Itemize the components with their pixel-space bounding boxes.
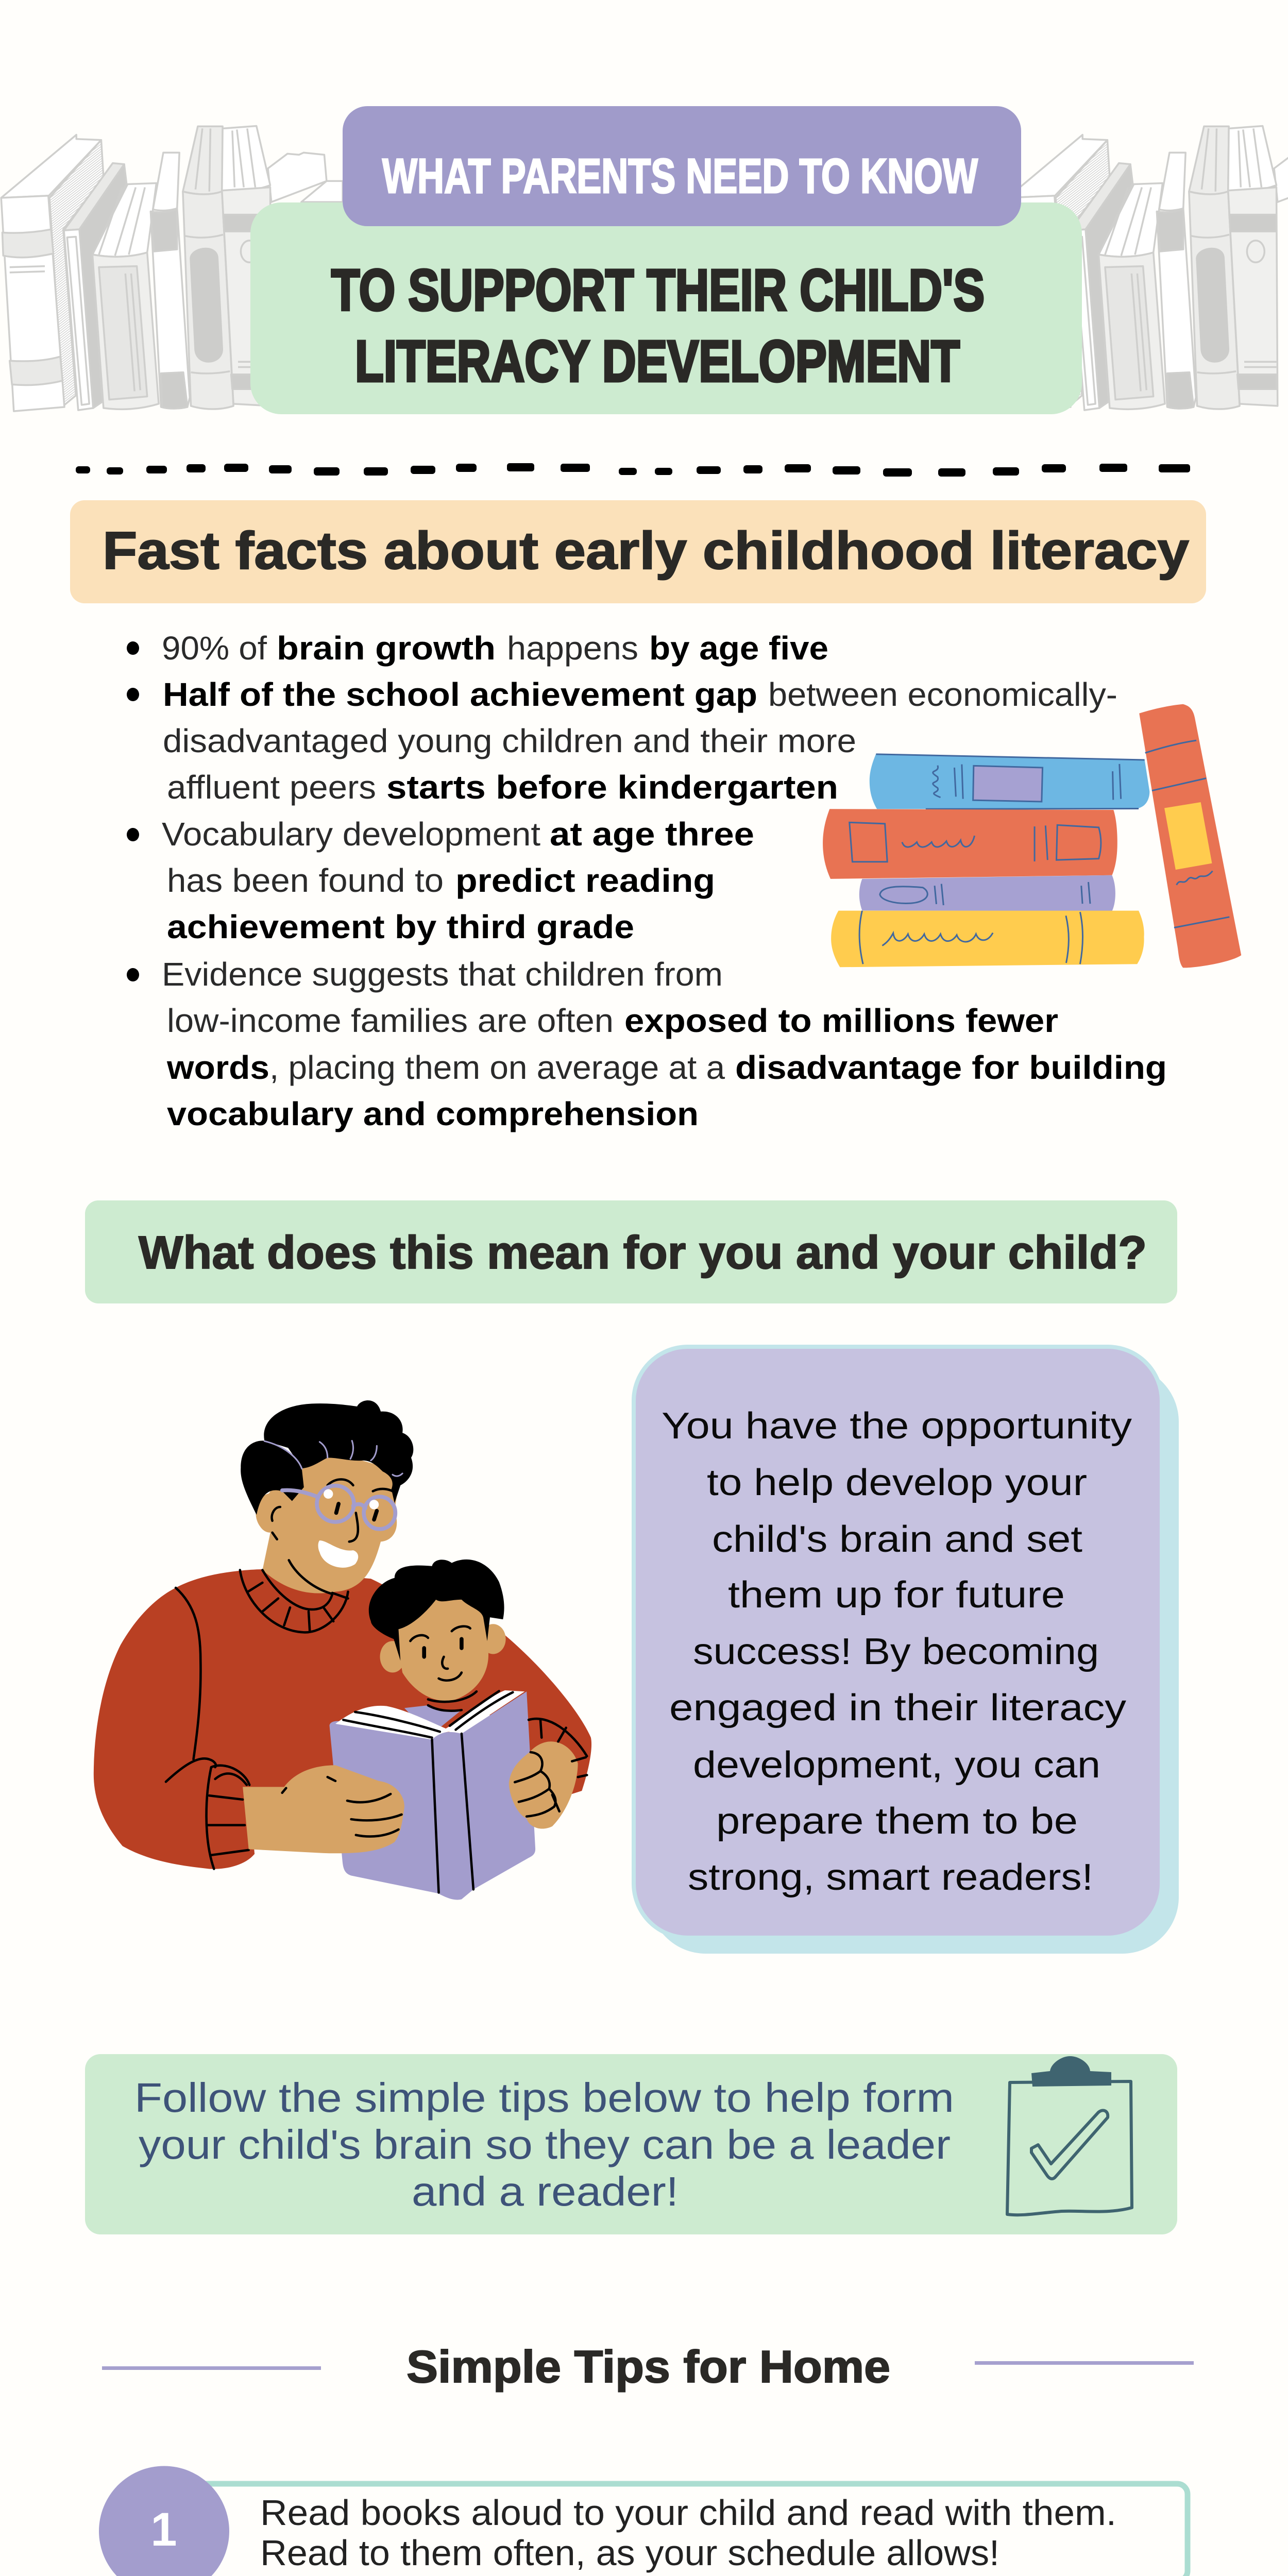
book: yellow xyxy=(831,911,1144,967)
heading: fast facts: Fast facts about early childhood literacy xyxy=(103,521,1189,580)
callout: you have the opportunity: engaged in their literacy xyxy=(669,1687,1126,1728)
illustration: right row of grey books xyxy=(1007,126,1288,411)
title line 3: LITERACY DEVELOPMENT xyxy=(355,329,960,394)
bullet 1: 90% of xyxy=(162,630,267,667)
tip 1 xyxy=(99,2466,1188,2576)
tip 1: Read books aloud to your child and read with them. xyxy=(260,2493,1116,2533)
divider: left xyxy=(102,2366,321,2370)
bullet 2: between economically- xyxy=(768,676,1117,713)
fast facts bullet list xyxy=(127,630,1167,1132)
title banner: green xyxy=(250,202,1082,414)
book: blue xyxy=(870,754,1149,809)
father head xyxy=(241,1400,413,1594)
heading panel: what does this mean xyxy=(85,1200,1177,1303)
heading: what does this mean: What does this mean for you and your child? xyxy=(139,1227,1147,1279)
bullet 2: disadvantaged young children and their more xyxy=(163,722,856,759)
bullet 3: has been found to xyxy=(167,862,444,899)
heading: simple tips for home: Simple Tips for Home xyxy=(406,2341,890,2392)
panel text: your child's brain so they can be a leader xyxy=(139,2122,951,2167)
divider: right xyxy=(975,2361,1194,2365)
callout: you have the opportunity: You have the opportunity xyxy=(662,1405,1132,1447)
tip 1: Read to them often, as your schedule allows! xyxy=(260,2533,999,2573)
open book xyxy=(330,1690,535,1900)
panel text: Follow the simple tips below to help form xyxy=(134,2075,954,2121)
icon: clipboard with check xyxy=(1007,2056,1132,2215)
callout: you have the opportunity: to help develop your xyxy=(707,1462,1087,1503)
bullet 3: achievement by third grade xyxy=(167,908,634,945)
callout: you have the opportunity: child's brain and set xyxy=(712,1519,1082,1560)
panel text xyxy=(134,2075,954,2214)
boy head xyxy=(369,1560,506,1736)
bullet 3: at age three xyxy=(550,816,754,853)
heading panel: fast facts xyxy=(70,500,1206,603)
callout: you have the opportunity xyxy=(634,1347,1179,1954)
title line 1: WHAT PARENTS NEED TO KNOW xyxy=(382,149,978,204)
callout: you have the opportunity: them up for future xyxy=(728,1574,1065,1616)
sweater details xyxy=(166,1570,348,1782)
left cuff xyxy=(207,1766,249,1869)
book: red xyxy=(823,809,1117,879)
callout: you have the opportunity: development, you can xyxy=(693,1744,1100,1786)
title line 2: TO SUPPORT THEIR CHILD'S xyxy=(331,258,985,323)
title banner: purple xyxy=(343,106,1021,226)
bullet 2 xyxy=(127,676,1117,806)
book: leaning red xyxy=(1139,704,1241,968)
bullet 1: brain growth xyxy=(277,630,496,667)
bullet 4: , placing them on average at a xyxy=(269,1049,725,1086)
tip 1: 1 xyxy=(150,2503,177,2556)
father hands xyxy=(243,1741,578,1853)
callout: you have the opportunity: prepare them to be xyxy=(716,1801,1078,1842)
bullet 4: words xyxy=(166,1049,269,1086)
illustration: father reading to child xyxy=(94,1400,591,1900)
bullet 4 xyxy=(127,956,1167,1132)
bullet 2: starts before kindergarten xyxy=(386,769,838,806)
bullet 3: Vocabulary development xyxy=(162,816,540,853)
panel: follow the simple tips xyxy=(85,2054,1177,2234)
panel text: and a reader! xyxy=(412,2168,679,2214)
illustration: left row of grey books xyxy=(1,126,343,411)
bullet 3 xyxy=(127,816,754,945)
father sweater xyxy=(94,1569,591,1869)
callout: you have the opportunity: success! By becoming xyxy=(693,1631,1099,1672)
right cuff xyxy=(529,1719,587,1777)
bullet 4: low-income families are often xyxy=(167,1002,614,1039)
illustration: stack of colourful books xyxy=(823,704,1241,968)
book: purple xyxy=(859,875,1115,911)
bullet 2: Half of the school achievement gap xyxy=(163,676,757,713)
callout: you have the opportunity: strong, smart readers! xyxy=(688,1857,1093,1898)
bullet 4: exposed to millions fewer xyxy=(624,1002,1058,1039)
bullet 4: vocabulary and comprehension xyxy=(167,1095,699,1132)
bullet 3: predict reading xyxy=(455,862,715,899)
bullet 4: disadvantage for building xyxy=(735,1049,1167,1086)
bullet 1: by age five xyxy=(649,630,828,667)
bullet 1: happens xyxy=(507,630,638,667)
bullet 2: affluent peers xyxy=(167,769,376,806)
bullet 4: Evidence suggests that children from xyxy=(162,956,723,993)
bullet 1 xyxy=(127,630,828,667)
